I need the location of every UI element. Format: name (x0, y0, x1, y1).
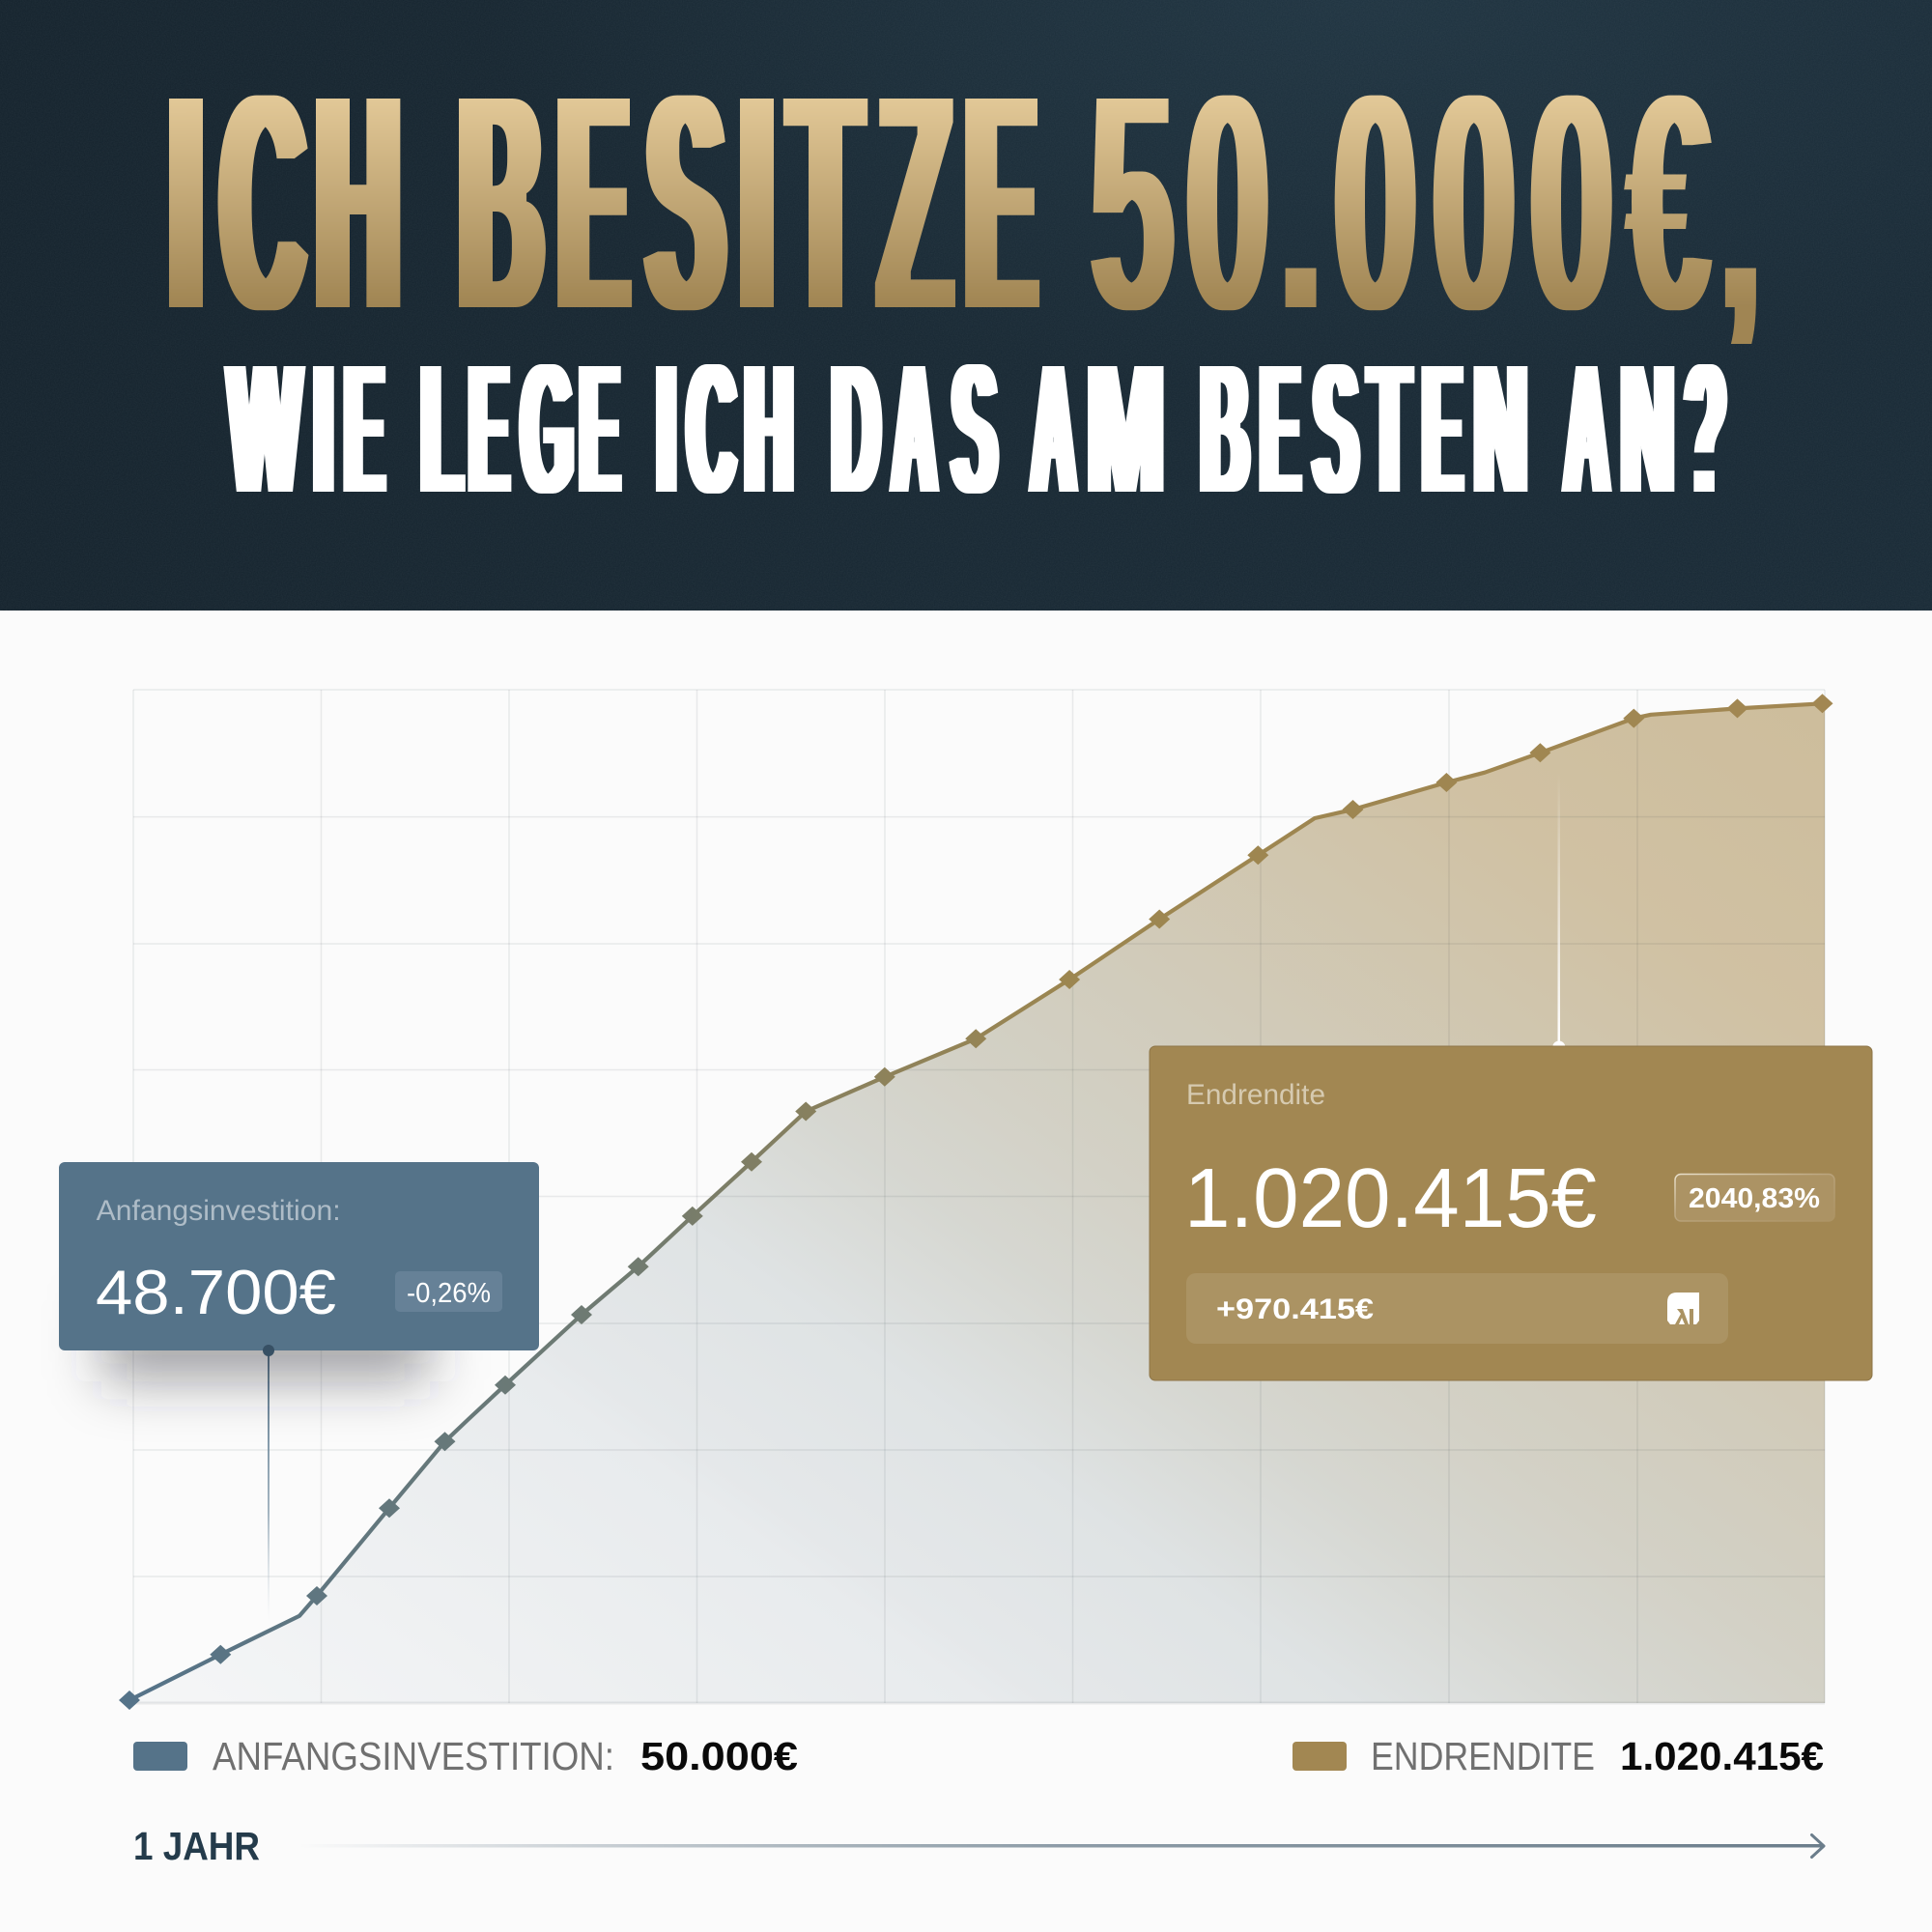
callout connector: initial investment (268, 1350, 270, 1621)
legend: final return: 1.020.415€ (1620, 1734, 1824, 1778)
percent badge (395, 1271, 502, 1312)
gain bar (1186, 1273, 1728, 1344)
legend: initial investment: ANFANGSINVESTITION: (213, 1734, 614, 1778)
time axis arrow (299, 1835, 1824, 1857)
icon: bank mark (1667, 1293, 1699, 1324)
gain bar: +970.415€ (1216, 1293, 1374, 1325)
title line 2: WIE LEGE ICH DAS AM BESTEN AN? (229, 324, 1725, 533)
chart area fill (129, 703, 1825, 1703)
legend: initial investment: 50.000€ (640, 1734, 798, 1778)
connector dot: initial investment (263, 1345, 274, 1356)
card shadow (101, 1299, 430, 1381)
header panel (0, 0, 1932, 611)
callout card: final return (1150, 1046, 1872, 1380)
card label: Anfangsinvestition: (97, 1195, 341, 1227)
time axis label: 1 JAHR (133, 1824, 260, 1868)
card value: 48.700€ (96, 1257, 336, 1327)
callout connector: final return (1552, 773, 1565, 1053)
callout card: initial investment (59, 1162, 539, 1350)
title line 1: 50.000€, (1091, 28, 1761, 379)
chart grid (133, 690, 1825, 1703)
percent badge (1675, 1175, 1834, 1221)
percent badge: 2040,83% (1689, 1183, 1820, 1214)
legend: final return: ENDRENDITE (1371, 1734, 1595, 1778)
card value: 1.020.415€ (1184, 1151, 1597, 1245)
data line (129, 703, 1822, 1700)
title line 1: ICH BESITZE (170, 26, 1035, 378)
percent badge: -0,26% (407, 1278, 491, 1309)
card label: Endrendite (1186, 1079, 1325, 1111)
data point markers (119, 694, 1833, 1710)
legend: initial investment (133, 1734, 798, 1778)
title line 1 (169, 95, 1756, 344)
area chart (119, 690, 1833, 1710)
legend: final return (1293, 1734, 1824, 1778)
